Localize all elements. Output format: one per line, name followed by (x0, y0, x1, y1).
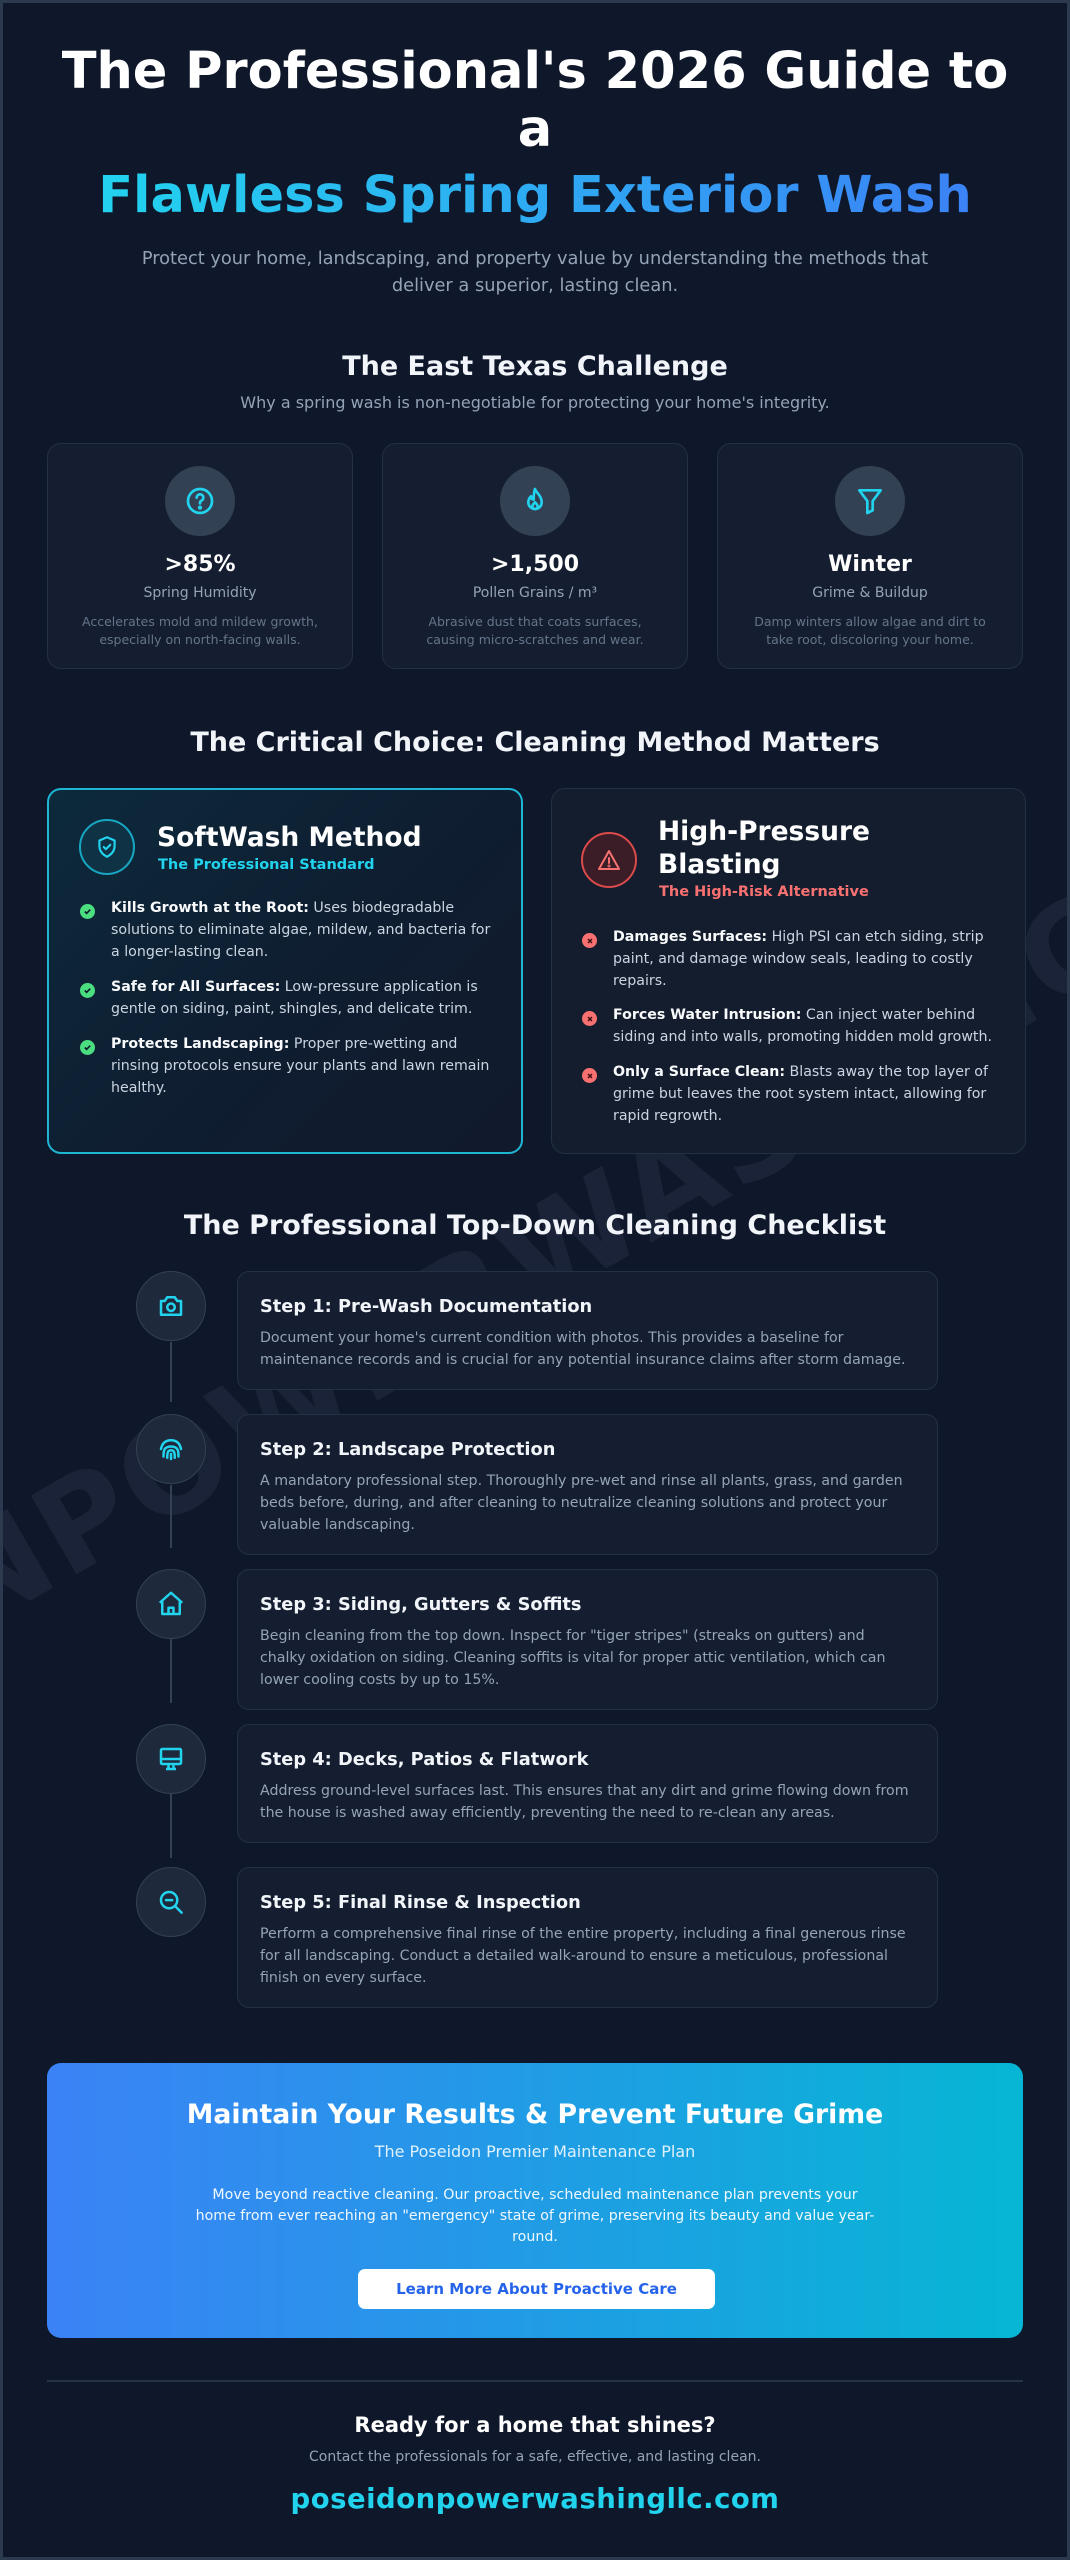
step 2: A mandatory professional step. Thoroughly pre-wet and rinse all plants, grass, and garden (260, 1473, 903, 1489)
bullet 1: paint, and damage window seals, leading to costly (613, 951, 973, 967)
step 2: valuable landscaping. (260, 1517, 415, 1533)
step 3: Step 3: Siding, Gutters & Soffits (260, 1594, 582, 1615)
button: Learn More About Proactive Care (396, 2280, 677, 2298)
panel: maintenance CTA (47, 2063, 1023, 2338)
panel: winter (717, 443, 1023, 669)
step 3 (237, 1569, 938, 1710)
desc: causing micro-scratches and wear. (426, 632, 644, 647)
bullet 1: solutions to eliminate algae, mildew, and bacteria for (111, 922, 490, 938)
panel: high-pressure (551, 788, 1026, 1154)
step 4: the house is washed away efficiently, preventing the need to re-clean any areas. (260, 1805, 835, 1821)
footer text: Contact the professionals for a safe, effective, and lasting clean. (309, 2449, 761, 2465)
step 5 (237, 1867, 938, 2008)
bullet 3 (80, 1036, 489, 1096)
step 3: Begin cleaning from the top down. Inspect for "tiger stripes" (streaks on gutters) and (260, 1628, 865, 1644)
CTA text: Move beyond reactive cleaning. Our proactive, scheduled maintenance plan prevents your (212, 2187, 858, 2203)
panel: softwash (47, 788, 523, 1154)
desc (82, 614, 318, 647)
panel: humidity (47, 443, 353, 669)
icon: shield (79, 819, 135, 875)
bullet 2: gentle on siding, paint, shingles, and delicate trim. (111, 1001, 472, 1017)
CTA text (196, 2187, 874, 2245)
step 3: chalky oxidation on siding. Cleaning soffits is vital for proper attic ventilation, which can (260, 1650, 886, 1666)
title: SoftWash Method (157, 822, 422, 853)
step 5: finish on every surface. (260, 1970, 426, 1986)
step 5: for all landscaping. Conduct a detailed walk-around to ensure a meticulous, professional (260, 1948, 888, 1964)
bullet 3 (582, 1064, 988, 1124)
subtitle: The High-Risk Alternative (659, 884, 869, 900)
bullet 1 (582, 929, 984, 989)
bullet 3: grime but leaves the root system intact, allowing for (613, 1086, 986, 1102)
label: Pollen Grains / m³ (473, 585, 597, 601)
desc: especially on north-facing walls. (99, 632, 301, 647)
stat: Winter (828, 552, 912, 577)
bullet 2 (582, 1007, 992, 1045)
bullet 3: rapid regrowth. (613, 1108, 722, 1124)
button (358, 2269, 715, 2309)
step 1: maintenance records and is crucial for any potential insurance claims after storm damage. (260, 1352, 906, 1368)
bullet 1: Kills Growth at the Root: Uses biodegradable (111, 900, 454, 916)
step 4: Address ground-level surfaces last. This ensures that any dirt and grime flowing down from (260, 1783, 909, 1799)
bullet 3: Protects Landscaping: Proper pre-wetting and (111, 1036, 457, 1052)
step 1: Step 1: Pre-Wash Documentation (260, 1296, 592, 1317)
title (62, 42, 1008, 225)
subtitle: The Professional Standard (158, 857, 374, 873)
step 4: Step 4: Decks, Patios & Flatwork (260, 1749, 588, 1770)
website url: poseidonpowerwashingllc.com (291, 2483, 779, 2515)
bullet 3: rinsing protocols ensure your plants and lawn remain (111, 1058, 489, 1074)
title: The Professional's 2026 Guide to a (62, 42, 1008, 159)
footer heading: Ready for a home that shines? (354, 2413, 716, 2437)
stat: >1,500 (491, 552, 579, 577)
step 1: Document your home's current condition with photos. This provides a baseline for (260, 1330, 844, 1346)
bullet 1: a longer-lasting clean. (111, 944, 268, 960)
step 1 (237, 1271, 938, 1390)
icon: flame (500, 466, 570, 536)
desc: take root, discoloring your home. (766, 632, 974, 647)
CTA text: round. (512, 2229, 558, 2245)
step 4 (237, 1724, 938, 1843)
step 2 (237, 1414, 938, 1555)
bullet 2: siding and into walls, promoting hidden mold growth. (613, 1029, 992, 1045)
step 5: Perform a comprehensive final rinse of the entire property, including a final generous rinse (260, 1926, 906, 1942)
icon: magnifier (136, 1867, 206, 1937)
CTA subtitle: The Poseidon Premier Maintenance Plan (375, 2142, 695, 2161)
bullet 1 (80, 900, 490, 960)
bullet 1: repairs. (613, 973, 667, 989)
CTA text: home from ever reaching an "emergency" state of grime, preserving its beauty and value year- (196, 2208, 874, 2224)
icon: camera (136, 1271, 206, 1341)
title (658, 816, 870, 880)
heading: east texas: The East Texas Challenge (342, 351, 728, 382)
step 2: beds before, during, and after cleaning to neutralize cleaning solutions and protect your (260, 1495, 887, 1511)
label: Spring Humidity (143, 585, 257, 601)
desc (754, 614, 986, 647)
desc: Accelerates mold and mildew growth, (82, 614, 318, 629)
icon: monitor (136, 1724, 206, 1794)
subtitle (142, 248, 928, 296)
subheading: Why a spring wash is non-negotiable for protecting your home's integrity. (240, 393, 830, 412)
icon: question (165, 466, 235, 536)
panel: pollen (382, 443, 688, 669)
desc: Damp winters allow algae and dirt to (754, 614, 986, 629)
step 5: Step 5: Final Rinse & Inspection (260, 1892, 581, 1913)
bullet 2: Safe for All Surfaces: Low-pressure application is (111, 979, 478, 995)
bullet 1: Damages Surfaces: High PSI can etch siding, strip (613, 929, 984, 945)
CTA title: Maintain Your Results & Prevent Future Grime (187, 2099, 883, 2130)
title: Blasting (658, 849, 781, 880)
icon: fingerprint (136, 1414, 206, 1484)
title: High-Pressure (658, 816, 870, 847)
heading: checklist: The Professional Top-Down Cleaning Checklist (184, 1210, 886, 1241)
label: Grime & Buildup (812, 585, 928, 601)
title: Flawless Spring Exterior Wash (98, 166, 972, 225)
subtitle: deliver a superior, lasting clean. (392, 275, 678, 296)
bullet 3: Only a Surface Clean: Blasts away the top layer of (613, 1064, 988, 1080)
bullet 2: Forces Water Intrusion: Can inject water behind (613, 1007, 975, 1023)
stat: >85% (164, 552, 236, 577)
icon: warning (581, 832, 637, 888)
desc (426, 614, 644, 647)
bullet 3: healthy. (111, 1080, 167, 1096)
step 3: lower cooling costs by up to 15%. (260, 1672, 499, 1688)
icon: house (136, 1569, 206, 1639)
desc: Abrasive dust that coats surfaces, (428, 614, 642, 629)
bullet 2 (80, 979, 478, 1017)
icon: filter (835, 466, 905, 536)
step 2: Step 2: Landscape Protection (260, 1439, 555, 1460)
heading: critical choice: The Critical Choice: Cleaning Method Matters (190, 727, 880, 758)
subtitle: Protect your home, landscaping, and property value by understanding the methods that (142, 248, 928, 269)
